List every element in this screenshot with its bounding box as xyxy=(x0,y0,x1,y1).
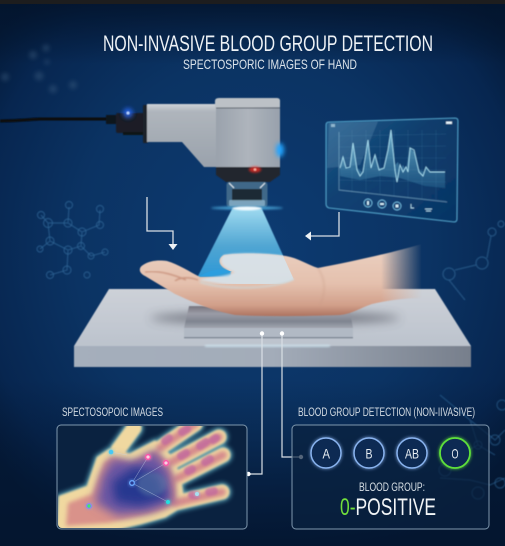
platform front xyxy=(74,346,471,367)
chart line xyxy=(340,130,445,182)
glass reflection xyxy=(327,122,378,168)
blood type AB xyxy=(397,438,427,468)
tablet icons xyxy=(364,199,432,211)
molecule decoration: top left xyxy=(1,44,77,93)
connector xyxy=(106,105,148,143)
molecule decoration: right xyxy=(443,221,504,300)
label: spectroscopic images: SPECTOSOPOIC IMAGES xyxy=(62,407,163,419)
hand xyxy=(140,244,422,316)
red LED xyxy=(249,166,261,172)
blue LED xyxy=(123,108,133,118)
result label: BLOOD GROUP: xyxy=(359,480,425,494)
top fade xyxy=(0,4,505,64)
arm xyxy=(147,104,218,167)
blood type AB: AB xyxy=(405,446,419,462)
tablet status xyxy=(446,122,452,124)
platform shadow xyxy=(150,312,400,324)
chart grid xyxy=(339,130,446,201)
blood type B: B xyxy=(366,446,372,462)
subtitle: SPECTOSPORIC IMAGES OF HAND xyxy=(183,56,357,72)
molecule decoration: lower right xyxy=(439,395,505,499)
arrow: scanner to hand xyxy=(147,197,178,250)
connector line to images panel xyxy=(246,331,264,476)
chart area xyxy=(340,130,445,188)
palm colour xyxy=(95,450,174,516)
platform edge glow xyxy=(205,345,330,347)
blood type O xyxy=(440,438,470,468)
palm light overlay xyxy=(199,253,294,286)
chart axes xyxy=(339,132,447,202)
top bar xyxy=(0,0,505,4)
thermal hand xyxy=(58,424,223,534)
palm glow arc xyxy=(200,279,294,288)
warm edge layer xyxy=(58,424,223,534)
lens housing xyxy=(226,182,268,207)
inner colour layer xyxy=(66,424,223,526)
cylinder cap xyxy=(215,98,280,108)
connector line to detection panel xyxy=(280,331,303,459)
arrow: monitor to hand xyxy=(305,212,339,240)
cylinder xyxy=(216,100,280,167)
finger crease xyxy=(145,271,198,281)
lens glow xyxy=(211,206,283,210)
cable xyxy=(0,119,108,121)
halo layer xyxy=(58,424,223,534)
panel: spectroscopic images xyxy=(57,424,247,534)
collar xyxy=(216,167,280,182)
blood type A xyxy=(311,438,341,468)
platform top xyxy=(74,289,471,346)
finger segments xyxy=(165,429,216,495)
wrist crease xyxy=(318,269,324,284)
light beam xyxy=(194,209,296,284)
panel: blood group detection xyxy=(292,425,489,529)
blood type B xyxy=(354,438,384,468)
platform xyxy=(74,289,471,367)
bottom fade xyxy=(0,380,505,546)
scan lines xyxy=(111,452,168,502)
result value: 0-POSITIVE xyxy=(340,494,436,521)
molecule decoration: left xyxy=(37,202,108,278)
blood type O: O xyxy=(452,446,459,462)
scanner device xyxy=(0,98,284,210)
sensor plate xyxy=(184,306,353,338)
scan points xyxy=(87,450,199,508)
side blue light xyxy=(276,143,284,157)
tablet monitor xyxy=(326,118,458,222)
blood type A: A xyxy=(322,446,331,462)
tablet glass xyxy=(326,118,458,222)
